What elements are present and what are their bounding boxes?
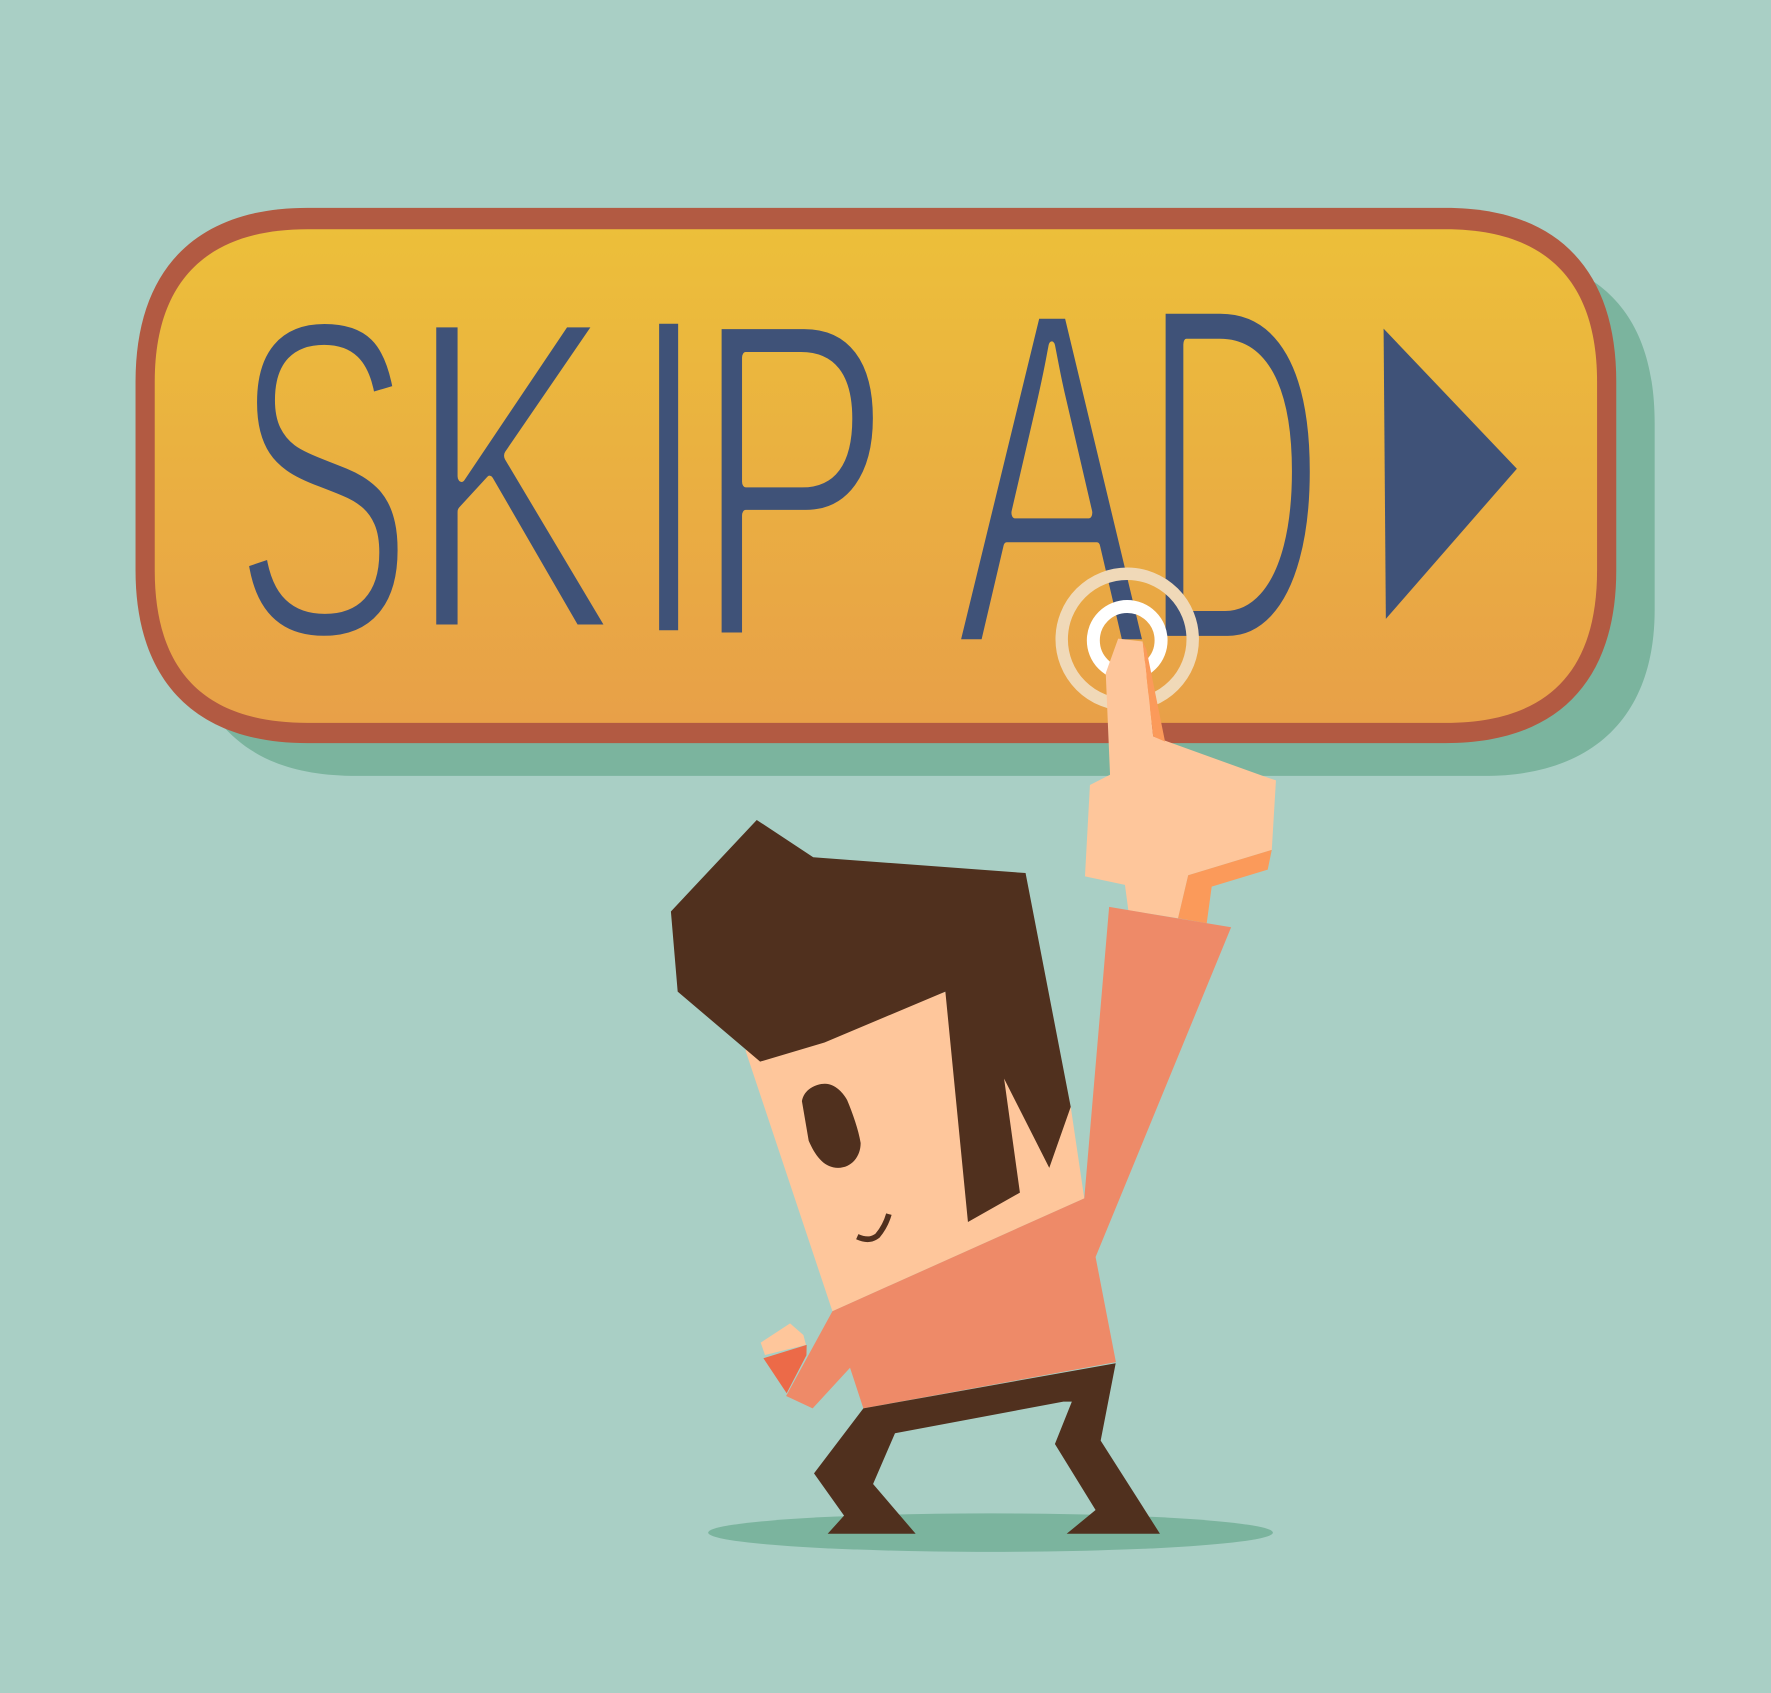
hair	[671, 820, 1071, 1222]
icon: play triangle	[1384, 329, 1517, 619]
skip ad button	[136, 203, 1655, 776]
shirt and raised sleeve	[786, 907, 1231, 1408]
button label: SKIP AD: P	[693, 224, 892, 735]
ground shadow	[708, 1513, 1273, 1552]
button label: SKIP AD: I	[630, 218, 707, 734]
button face	[155, 229, 1597, 723]
character: pointing man	[671, 639, 1276, 1552]
button border	[136, 208, 1616, 743]
lower fist	[761, 1323, 807, 1393]
trousers	[814, 1363, 1160, 1534]
face	[745, 971, 1084, 1311]
button label: SKIP AD: D	[1142, 203, 1325, 745]
button label: SKIP AD: A	[956, 209, 1149, 748]
button label: SKIP AD	[233, 203, 1325, 748]
smile	[857, 1214, 889, 1239]
icon: touch ripple rings	[1062, 574, 1193, 705]
button label: SKIP AD: K	[407, 225, 616, 726]
pointing hand	[1085, 639, 1276, 923]
button shadow	[220, 271, 1655, 776]
eye	[802, 1084, 861, 1168]
button label: SKIP AD: S	[233, 224, 413, 734]
